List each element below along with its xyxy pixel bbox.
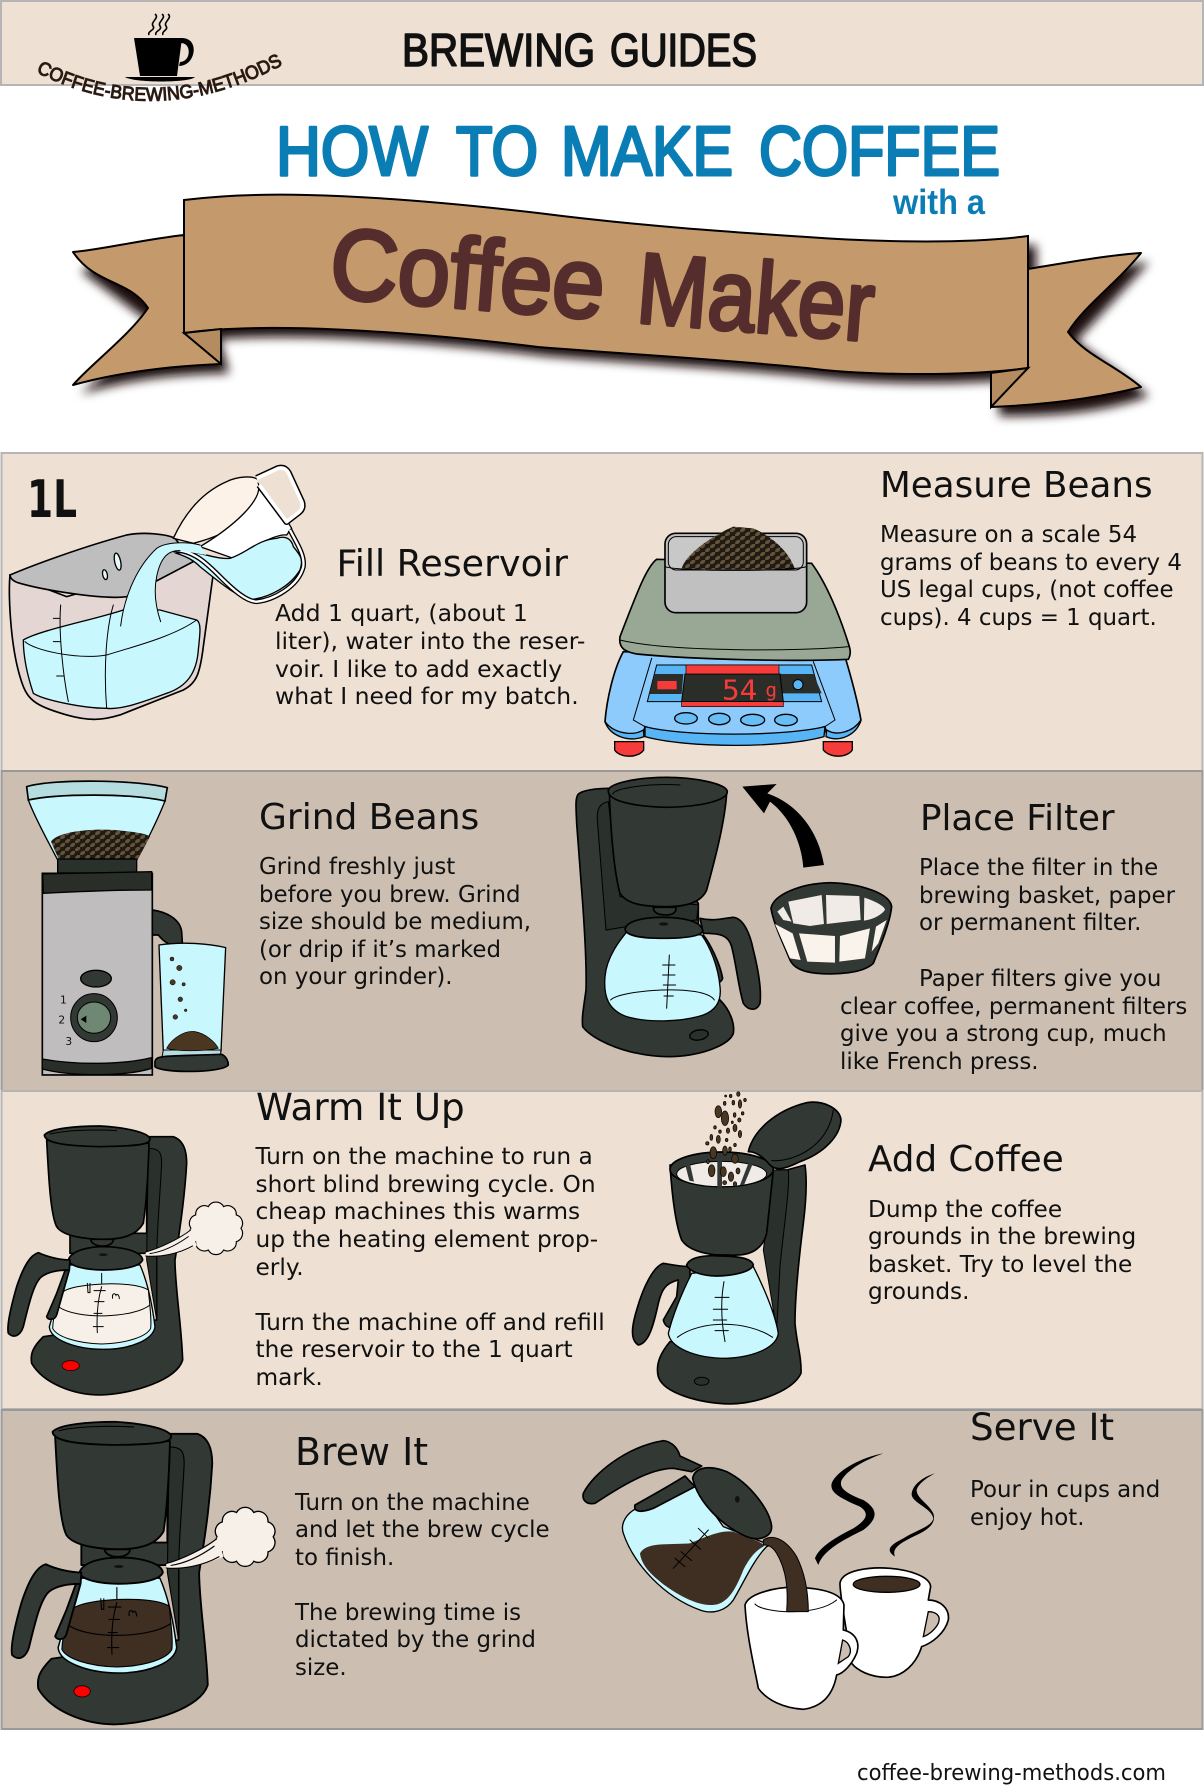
scale unit: g [765, 679, 777, 702]
banner text [326, 207, 878, 363]
title: HOW [276, 112, 428, 190]
text: measure beans body: grams of beans to every 4 [880, 550, 1182, 576]
text: warm it up body: mark. [256, 1364, 323, 1391]
title: COFFEE [759, 112, 1000, 190]
icon: steam cloud [166, 1507, 275, 1568]
text: warm it up body: erly. [256, 1254, 304, 1281]
text: brew it body: size. [295, 1655, 347, 1681]
title: MAKE [561, 112, 733, 190]
text: measure beans body: cups). 4 cups = 1 quart. [880, 605, 1157, 631]
icon: carafe pouring into cups [583, 1441, 948, 1709]
text: warm it up body: cheap machines this warms [256, 1198, 580, 1225]
text: brew it body: to finish. [295, 1545, 394, 1571]
text: fill reservoir body: Add 1 quart, (about 1 [275, 599, 528, 627]
text: brew it body: dictated by the grind [295, 1627, 536, 1653]
text: place filter body: like French press. [840, 1049, 1039, 1075]
text: measure beans body: US legal cups, (not coffee [880, 577, 1174, 603]
text: grind beans body: (or drip if it’s marked [259, 937, 501, 963]
text: serve it body: enjoy hot. [970, 1505, 1085, 1531]
text: grind beans body: before you brew. Grind [259, 882, 521, 908]
text: add coffee body: Dump the coffee [868, 1196, 1062, 1223]
text: fill reservoir body: liter), water into the reser- [275, 627, 585, 655]
icon: steam cloud [146, 1202, 243, 1256]
text: warm it up body: the reservoir to the 1 quart [256, 1336, 573, 1363]
text: place filter body: brewing basket, paper [919, 883, 1176, 909]
heading: add coffee: Add Coffee [868, 1139, 1064, 1180]
heading: fill reservoir: Fill Reservoir [336, 542, 568, 585]
text: add coffee body: grounds. [868, 1278, 970, 1305]
icon: cup [134, 38, 194, 76]
icon: filter basket [771, 883, 892, 974]
scale reading: 54 [722, 675, 757, 706]
text: place filter body: give you a strong cup, much [840, 1021, 1167, 1047]
panel: brew it and serve it [2, 1405, 1202, 1729]
arrow: filter goes in basket [742, 784, 824, 868]
text: brew it body: Turn on the machine [294, 1490, 530, 1516]
text: warm it up body: short blind brewing cycle. On [256, 1171, 596, 1198]
icon: water pouring into reservoir [9, 468, 304, 719]
curved site name: COFFEE-BREWING-METHODS [38, 54, 282, 102]
heading: warm it up: Warm It Up [256, 1085, 465, 1129]
icon: steam [149, 14, 169, 35]
icon: burr grinder [27, 781, 228, 1075]
ribbon banner [73, 195, 1149, 416]
heading: grind beans: Grind Beans [259, 797, 479, 838]
subtitle: with a: with a [892, 183, 985, 222]
icon: coffee maker warming [8, 1126, 243, 1395]
panel: warm it up and add coffee [2, 1085, 1202, 1409]
dial numbers: 3 [65, 1035, 72, 1048]
text: add coffee body: basket. Try to level the [868, 1251, 1132, 1278]
falling coffee grounds [706, 1092, 746, 1186]
heading: place filter: Place Filter [920, 798, 1115, 839]
logo: coffee cup with curved site name [38, 14, 282, 102]
text: place filter body: Paper filters give you [919, 966, 1161, 992]
text: measure beans body: Measure on a scale 54 [880, 522, 1137, 548]
text: brew it body: The brewing time is [294, 1600, 521, 1626]
text: fill reservoir body: what I need for my batch. [275, 682, 579, 710]
panel: fill reservoir and measure beans [2, 453, 1202, 771]
heading: brewing guides: BREWING [402, 24, 595, 76]
icon: saucer [125, 77, 195, 82]
heading: serve it: Serve It [970, 1405, 1114, 1449]
dial numbers: 2 [58, 1013, 65, 1026]
text: place filter body: or permanent filter. [919, 910, 1141, 936]
header bar [1, 1, 1203, 85]
text: warm it up body: Turn the machine off and refill [254, 1309, 605, 1336]
text: add coffee body: grounds in the brewing [868, 1223, 1136, 1250]
text: serve it body: Pour in cups and [970, 1477, 1160, 1503]
icon: coffee maker brewing [12, 1422, 275, 1724]
text: brew it body: and let the brew cycle [295, 1517, 550, 1543]
text: warm it up body: up the heating element prop- [256, 1226, 598, 1253]
icon: digital scale with beans [605, 527, 861, 756]
text: grind beans body: size should be medium, [259, 909, 531, 935]
text: place filter body: Place the filter in the [919, 855, 1158, 881]
footer: site url: coffee-brewing-methods.com [857, 1760, 1166, 1786]
text: place filter body: clear coffee, permanent filters [840, 994, 1187, 1020]
text: warm it up body: Turn on the machine to run a [254, 1143, 593, 1170]
text: grind beans body: Grind freshly just [259, 854, 455, 880]
heading: measure beans: Measure Beans [880, 465, 1153, 506]
heading: brewing guides: GUIDES [610, 24, 757, 76]
label: 1L: 1L [27, 470, 77, 530]
heading: brew it: Brew It [295, 1430, 428, 1474]
banner text: Maker [633, 232, 878, 363]
icon: adding grounds to brewing basket [632, 1092, 841, 1404]
text: grind beans body: on your grinder). [259, 964, 453, 990]
icon: steam wisps [815, 1453, 935, 1565]
text: fill reservoir body: voir. I like to add exactly [275, 655, 562, 683]
title: TO [456, 112, 538, 190]
icon: coffee maker with water [576, 777, 892, 1057]
dial numbers: 1 [60, 994, 67, 1007]
banner text: Coffee [326, 207, 609, 341]
panel: grind beans and place filter [2, 771, 1202, 1091]
